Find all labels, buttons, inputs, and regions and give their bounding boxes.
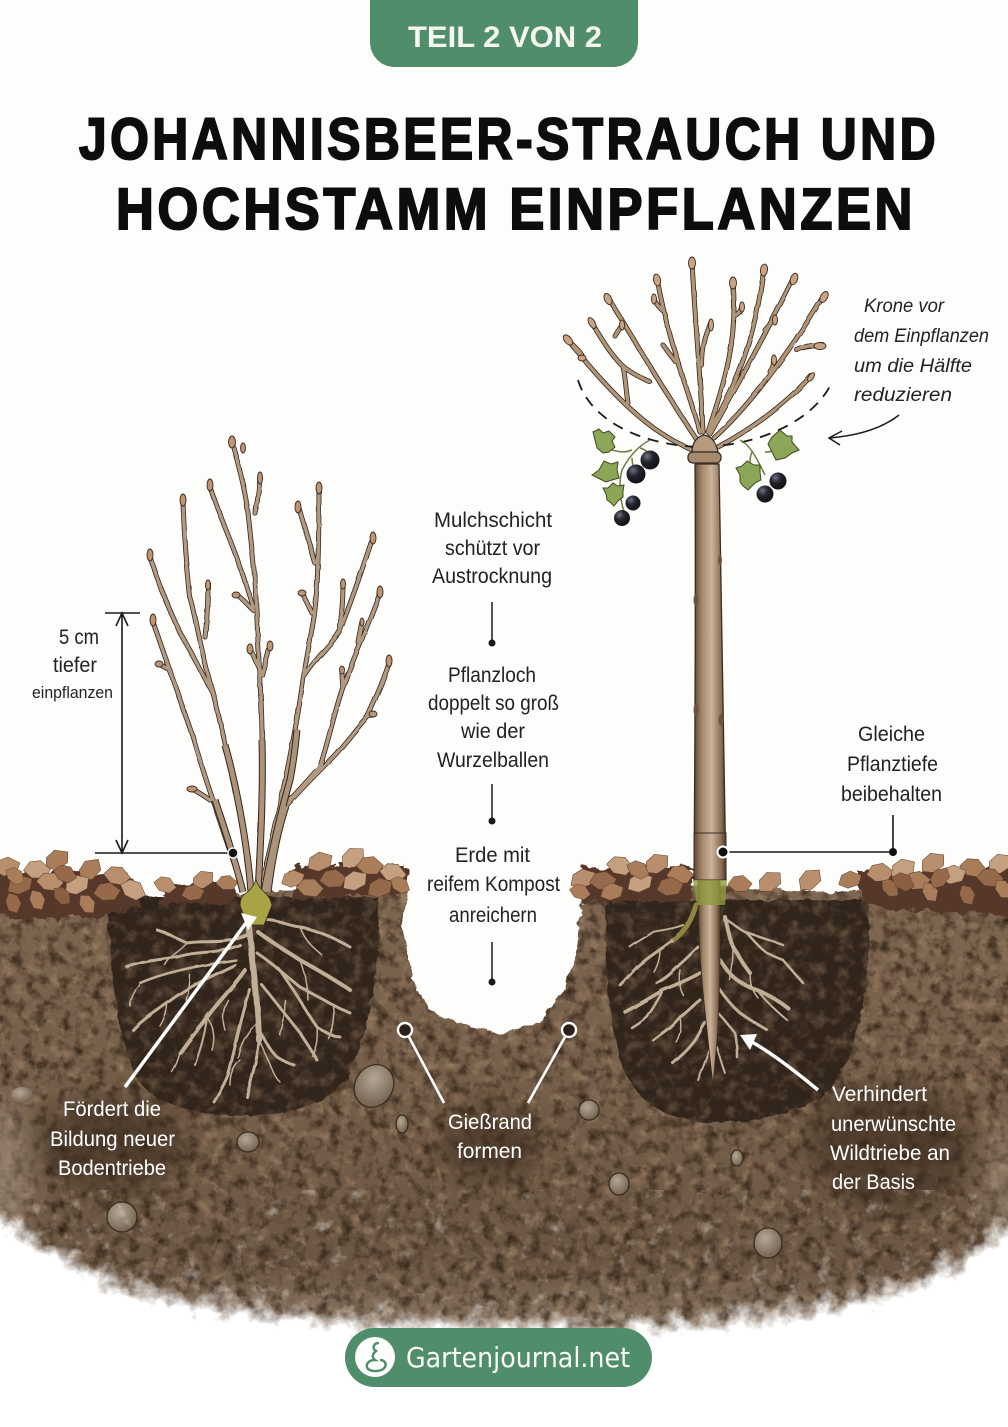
shrub lower stems fill [215,730,297,892]
label: planting depth shrub: einpflanzen [32,683,113,702]
trunk yellow base [693,880,727,905]
shrub buds [147,436,392,792]
label: same planting depth: Pflanztiefe [847,753,938,776]
label: planting hole: Pflanzloch [448,664,536,687]
label: planting hole: doppelt so groß [428,692,559,715]
label: planting hole [428,664,559,772]
stones [11,1057,782,1258]
left plant: currant shrub [127,436,392,1102]
label: wild shoots: Verhindert [832,1083,927,1106]
pointers: watering rim [398,1023,576,1103]
berries [756,472,786,502]
pointer: same planting depth [718,815,897,858]
title: HOCHSTAMM EINPFLANZEN [116,177,916,242]
label: same planting depth: beibehalten [841,783,942,806]
label: wild shoots: Wildtriebe an [830,1142,950,1165]
leaves [736,430,799,490]
tree trunk [694,464,726,880]
mulch: dark base [0,866,1008,920]
label: wild shoots [830,1083,956,1194]
label: compost: anreichern [449,904,537,927]
mulch: leaves right of tree [727,849,1008,906]
label: wild shoots: der Basis [832,1171,915,1194]
label: crown note: Krone vor [864,296,945,317]
label: crown note: reduzieren [854,385,952,406]
soil body [0,884,1008,1370]
label: mulch: schützt vor [445,537,540,560]
label: new shoots: Bildung neuer [50,1128,175,1151]
stems [740,440,780,475]
tree trunk below ground [698,880,720,1085]
graft band [694,833,726,880]
label: new shoots: Bodentriebe [58,1157,166,1180]
label: planting hole: wie der [460,720,525,743]
mulch: leaves left pile [0,846,149,916]
crown buds [561,257,830,383]
icon: logo [355,1337,395,1377]
shrub roots [127,920,350,1102]
shrub new shoots at base [240,880,272,925]
right plant: standard tree [561,257,832,1085]
tree roots [620,905,803,1080]
label: wild shoots: unerwünschte [831,1113,956,1136]
label: mulch [432,509,552,588]
left currant leaves and berries [592,429,660,526]
rough fading lower soil edge [0,1190,1008,1427]
label: compost: Erde mit [455,844,530,867]
lighter left soil edge [0,1100,1008,1240]
shrub lower stems outline [215,730,297,892]
label: planting depth shrub [32,626,113,702]
mulch: leaves right of shrub [281,843,413,901]
label: mulch: Mulchschicht [434,509,552,532]
label: same planting depth [841,723,942,806]
title [79,107,939,242]
soil cross-section [0,884,1008,1427]
footer brand pill: Gartenjournal.net [406,1341,630,1374]
top badge: part indicator: TEIL 2 VON 2 [408,21,602,54]
arrow: wild shoots [740,1034,818,1090]
label: compost [427,844,560,927]
pointer: new shoots [125,913,257,1087]
leaves [592,429,624,506]
trunk nodes [694,555,724,726]
label: new shoots [50,1098,175,1180]
label: new shoots: Fördert die [63,1098,161,1121]
stems [612,440,650,515]
mulch: leaves left of tree [567,850,695,903]
label: mulch: Austrocknung [432,565,552,588]
label: same planting depth: Gleiche [858,723,925,746]
dimension arrow: 5 cm depth [95,613,238,858]
pointer: planting hole [488,784,496,824]
label: watering rim [448,1111,532,1163]
right currant leaves and berries [736,430,799,502]
label: crown note: dem Einpflanzen [854,326,989,347]
label: planting depth shrub: 5 cm [59,626,99,649]
top badge: part indicator [370,0,638,67]
berries [614,450,660,526]
pruning dashed arc [578,380,832,447]
pointer: mulch [488,602,496,646]
footer brand pill [345,1328,652,1387]
label: planting depth shrub: tiefer [53,654,97,677]
label: crown note: um die Hälfte [854,356,972,377]
tree crown outline [568,262,824,450]
left planting pit [107,897,379,1116]
shrub branches outline [150,442,390,890]
label: planting hole: Wurzelballen [437,749,549,772]
tree crown fill [568,262,824,450]
shrub branches fill [150,442,390,890]
label: compost: reifem Kompost [427,873,560,896]
arrow: crown note [829,415,899,445]
mulch layer [0,843,1008,920]
mulch: leaves centre-left pile [152,868,239,902]
right planting pit [605,900,869,1122]
pointer: compost [488,942,496,986]
dark patches behind white labels [34,1083,972,1207]
crown base collar [688,435,721,463]
label: crown note [854,296,989,406]
label: watering rim: Gießrand [448,1111,532,1134]
label: watering rim: formen [457,1140,522,1163]
